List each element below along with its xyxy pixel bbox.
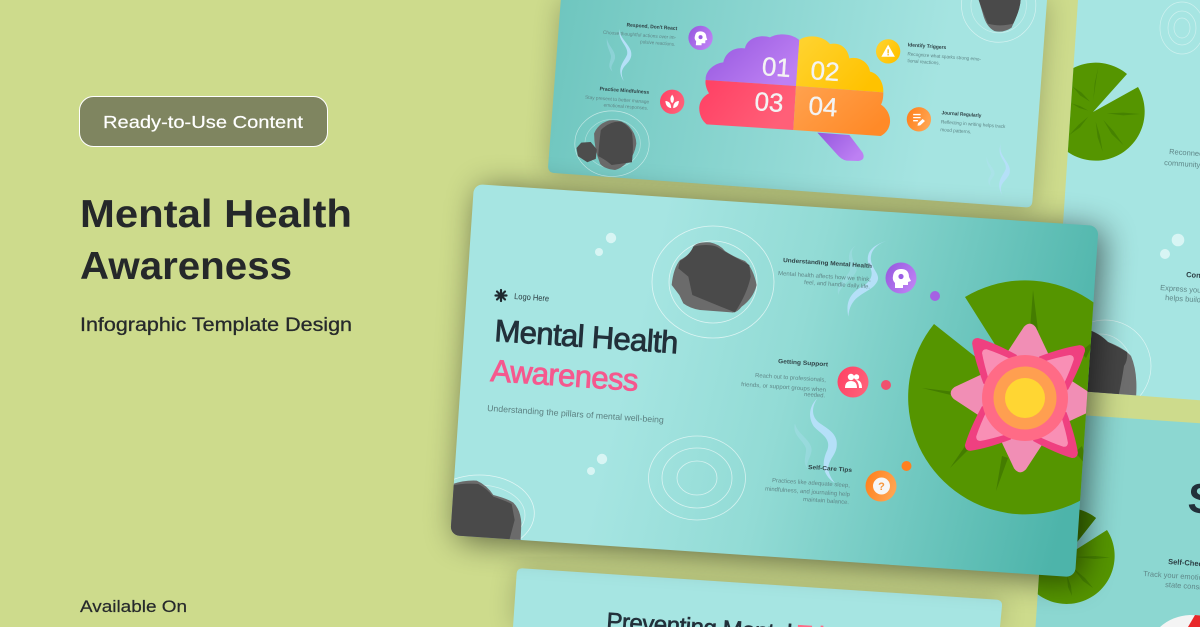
text: self-care tips: Self-Care Tips — [808, 465, 853, 474]
badge: ready-to-use content — [80, 96, 328, 146]
text: getting support: friends, or support groups when — [741, 382, 826, 394]
text: respond: Respond, Don't React — [626, 22, 678, 32]
icon: warning yellow — [876, 39, 900, 64]
icon: people red — [838, 366, 868, 398]
icon: journal orange — [907, 107, 931, 131]
icon: head purple — [688, 26, 713, 50]
text: mindfulness: emotional responses. — [603, 102, 648, 112]
text: respond: Choose thoughtful actions over im- — [603, 30, 677, 41]
title: Awareness — [80, 245, 292, 288]
ripple rings upper right — [1160, 2, 1200, 54]
text: respond: pulsive reactions. — [640, 39, 675, 48]
panel: top slide — [548, 0, 1047, 207]
text: getting support: Reach out to professionals, — [755, 373, 826, 384]
text: journal — [940, 110, 1006, 134]
icon: lily pad lower right — [1038, 510, 1115, 604]
streams top slide — [607, 29, 1010, 195]
brain numbers: 02 — [810, 55, 841, 87]
brain numbers — [755, 57, 838, 116]
rock top — [672, 242, 757, 312]
text: mindfulness: Stay present to better manage — [585, 95, 650, 105]
brain numbers: 03 — [754, 86, 785, 118]
text: understanding mental health: feel, and handle daily life. — [804, 280, 870, 290]
panel: upper right slide — [1063, 0, 1200, 400]
icon: question orange — [866, 470, 896, 502]
logo text: Logo Here — [514, 291, 550, 303]
rock with rings top right — [961, 0, 1036, 42]
logo mark — [496, 290, 506, 301]
text: journal: Journal Regularly — [941, 110, 982, 119]
text: self-care tips: mindfulness, and journaling help — [765, 487, 851, 498]
icon: lily pad main — [908, 280, 1142, 514]
text: self-care tips: Practices like adequate sleep, — [772, 478, 850, 489]
rock with rings upper right — [1088, 320, 1152, 396]
text: getting support: needed. — [804, 392, 826, 399]
available on label: Available On — [80, 597, 187, 616]
bubbles upper right — [1160, 234, 1184, 259]
text: getting support — [741, 359, 828, 399]
brain: quadrant 02 — [796, 36, 883, 92]
bubbles upper — [595, 233, 616, 256]
text: getting support: Getting Support — [778, 359, 828, 368]
brain: quadrant 04 — [793, 86, 890, 136]
text: connect snippet — [1160, 272, 1200, 302]
icon: question orange: ? — [878, 481, 885, 493]
brain numbers: 04 — [808, 90, 839, 122]
brain numbers: 01 — [761, 51, 792, 83]
dot red — [881, 380, 891, 390]
stream lower — [794, 398, 837, 483]
heading: preventing mental — [606, 608, 885, 627]
bubbles lower — [587, 454, 607, 475]
panel: main slide — [424, 184, 1142, 581]
text: mindfulness — [585, 86, 650, 112]
icon: lotus red — [660, 90, 684, 114]
text: self-care tips: maintain balance. — [803, 497, 850, 506]
brain: quadrant 03 — [699, 80, 796, 130]
dot orange — [902, 461, 912, 471]
icon: lily pad upper right — [1068, 62, 1145, 161]
rocks with rings bottom left — [575, 111, 649, 176]
text: journal: mood patterns. — [940, 127, 971, 135]
brain graphic — [699, 34, 890, 161]
badge: ready-to-use content: Ready-to-Use Content — [103, 112, 303, 132]
brain: quadrant 01 — [706, 34, 799, 86]
text: triggers: Recognize what sparks strong emo- — [907, 51, 982, 63]
rings and rock bottom left — [450, 474, 535, 540]
text: understanding mental health — [778, 258, 872, 290]
text: self-care tips — [765, 465, 853, 506]
panel: lower right slide — [1036, 416, 1200, 627]
panel: bottom slide — [513, 568, 1002, 627]
ripple rings lower — [648, 436, 746, 520]
text: mindfulness: Practice Mindfulness — [599, 86, 650, 96]
text: respond — [603, 22, 678, 48]
icon: lotus flower — [949, 322, 1101, 474]
dot purple — [930, 291, 940, 301]
text: self-check snippet — [1144, 558, 1200, 590]
icon: head purple — [886, 262, 916, 294]
text: understanding mental health: Understanding Mental Health — [783, 258, 872, 270]
text: journal: Reflecting in writing helps track — [941, 119, 1006, 130]
text: triggers: tional reactions. — [907, 58, 940, 67]
subtitle: Understanding the pillars of mental well-being — [487, 403, 664, 425]
text: understanding mental health: Mental health affects how we think, — [778, 271, 871, 283]
subtitle: Infographic Template Design — [80, 315, 352, 336]
heading: mental health: Mental Health — [494, 313, 679, 360]
text: triggers: Identify Triggers — [908, 42, 947, 51]
text: triggers — [907, 42, 982, 67]
heading: awareness: Awareness — [490, 353, 640, 398]
title: Mental Health — [80, 193, 352, 236]
title — [80, 193, 352, 288]
brain stem — [817, 133, 864, 161]
text: reconnect snippet — [1164, 148, 1200, 169]
stream upper — [838, 240, 890, 317]
icon: lifebuoy — [1160, 615, 1200, 627]
ripple rings around top rock — [652, 226, 774, 338]
